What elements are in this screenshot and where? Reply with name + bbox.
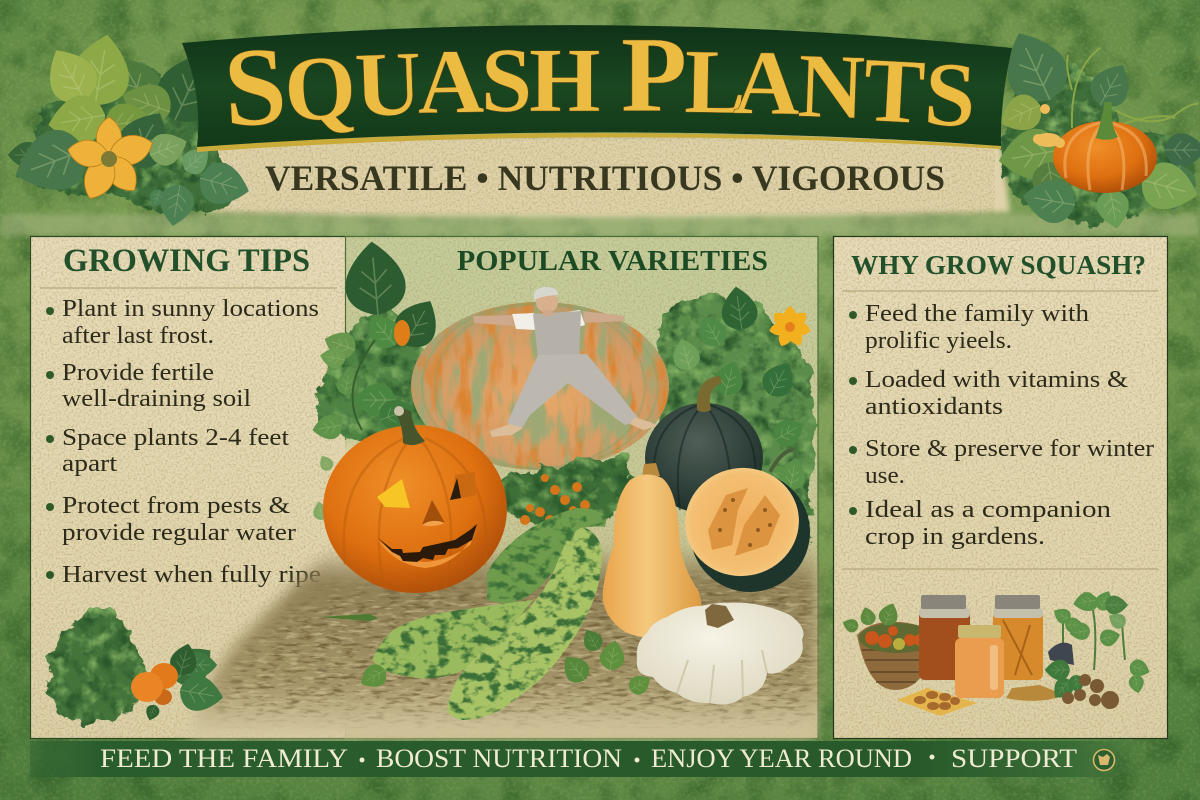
title: S [221, 24, 290, 151]
heading: why grow squash: WHY GROW SQUASH? [851, 250, 1146, 280]
title: N [796, 34, 866, 138]
title: U [353, 32, 423, 136]
heading: popular varieties: POPULAR VARIETIES [457, 245, 768, 277]
benefits list: Feed the family with [865, 301, 1089, 327]
illustration: front zucchini [447, 527, 602, 720]
title: A [733, 31, 801, 134]
face [377, 472, 478, 568]
seed cavity [708, 488, 780, 556]
illustration: cut acorn squash [676, 450, 810, 592]
benefits list [849, 301, 1154, 550]
squash blossom [66, 117, 157, 204]
icon: background foliage right [650, 284, 813, 540]
title: S [481, 29, 532, 131]
yellow buds [1033, 104, 1065, 148]
title: T [861, 38, 928, 143]
benefits list: Store & preserve for winter [865, 436, 1154, 462]
illustration: bottom left bush and pumpkins [49, 612, 226, 722]
icon: left foliage and squash blossom [6, 30, 254, 229]
footer text: FEED THE FAMILY [100, 744, 348, 773]
subtitle: VERSATILE • NUTRITIOUS • VIGOROUS [265, 158, 945, 198]
tips list: Provide fertile [62, 360, 214, 386]
title banner [182, 16, 1012, 152]
benefits list: Loaded with vitamins & [865, 367, 1128, 393]
icon: background foliage left [310, 239, 448, 521]
tips list: after last frost. [62, 323, 214, 349]
illustration: carved jack-o-lantern [323, 406, 507, 593]
title: L [684, 30, 747, 133]
benefits list: use. [865, 463, 905, 489]
header parchment band [205, 130, 1010, 217]
benefits list: Ideal as a companion [865, 497, 1111, 523]
tips list: Plant in sunny locations [62, 296, 319, 322]
benefits list: crop in gardens. [865, 524, 1045, 550]
illustration: leaves under the zucchini [318, 614, 655, 698]
illustration: basket of tomatoes [841, 600, 938, 690]
footer text [100, 744, 1077, 773]
footer text: BOOST NUTRITION [376, 744, 622, 773]
footer band [30, 741, 1140, 777]
tips list [46, 296, 321, 588]
title: S [922, 42, 978, 147]
illustration: man lying on the giant pumpkin [473, 287, 658, 437]
tips list: Protect from pests & [62, 493, 290, 519]
title: A [417, 30, 485, 133]
panel: popular varieties background [338, 236, 818, 738]
tips list: apart [62, 451, 117, 477]
illustration: seedlings and roots [1045, 588, 1152, 709]
icon: yellow flower [768, 306, 812, 349]
illustration: white pattypan squash [637, 603, 804, 705]
tips list: well-draining soil [62, 386, 251, 412]
icon: right foliage and small pumpkin [992, 21, 1200, 231]
soil ground [190, 545, 816, 737]
title: Q [282, 35, 359, 141]
panel: growing tips [30, 236, 346, 738]
footer text: ENJOY YEAR ROUND [651, 744, 912, 773]
heading: growing tips: GROWING TIPS [63, 243, 310, 279]
small pumpkin [1053, 102, 1157, 193]
icon: footer emblem [1094, 750, 1114, 770]
tips list: Harvest when fully ripe [62, 562, 321, 588]
illustration: back zucchini [487, 508, 607, 603]
benefits list: antioxidants [865, 394, 1003, 420]
illustration: dark green acorn squash [645, 376, 763, 513]
panel: why grow squash [834, 236, 1168, 738]
title: H [529, 29, 601, 131]
illustration: nuts on tray [897, 685, 1065, 716]
footer text: SUPPORT [951, 744, 1077, 773]
illustration: preserve jars [919, 595, 1043, 698]
illustration: left zucchini [372, 600, 533, 678]
benefits list: prolific yieels. [865, 328, 1012, 354]
tips list: provide regular water [62, 520, 296, 546]
illustration: sprig and berries [495, 458, 645, 530]
illustration: giant pumpkin [411, 302, 669, 470]
illustration: butternut squash [603, 463, 701, 638]
tips list: Space plants 2-4 feet [62, 425, 289, 451]
title: P [621, 16, 687, 135]
